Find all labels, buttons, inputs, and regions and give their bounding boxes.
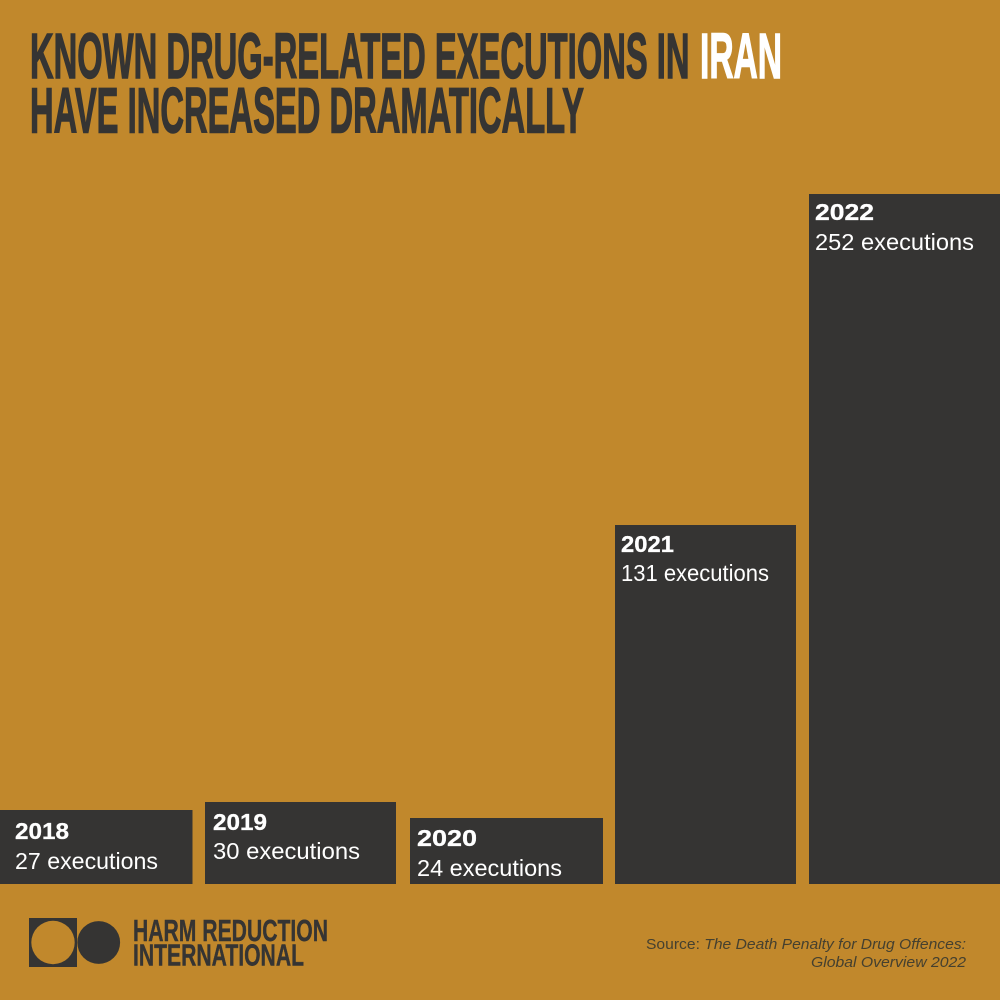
logo wordmark	[133, 914, 328, 972]
bar chart	[0, 194, 1000, 884]
bar: 2018	[0, 810, 192, 884]
bar: 2018: 2018	[15, 818, 69, 844]
source note: Global Overview 2022	[811, 954, 967, 971]
source note	[646, 936, 967, 971]
logo wordmark: HARM REDUCTION	[133, 914, 328, 948]
logo: Harm Reduction International	[29, 914, 328, 972]
bar: 2020: 24 executions	[417, 855, 562, 881]
title: IRAN	[700, 20, 782, 92]
bar: 2020: 2020	[417, 825, 477, 851]
title	[30, 20, 782, 146]
bar: 2019: 30 executions	[213, 838, 360, 864]
bar: 2019: 2019	[213, 809, 267, 835]
bar: 2022	[809, 194, 1000, 884]
icon: square with circle and solid circle	[29, 918, 120, 967]
bar: 2021: 2021	[621, 531, 674, 557]
logo wordmark: INTERNATIONAL	[133, 938, 304, 972]
bar: 2019	[205, 802, 396, 884]
bar: 2020	[410, 818, 603, 884]
bar: 2021: 131 executions	[621, 560, 769, 586]
bar: 2018: 27 executions	[15, 848, 158, 874]
source note: Source: The Death Penalty for Drug Offences:	[646, 936, 966, 953]
bar: 2022: 252 executions	[815, 229, 974, 255]
bar: 2022: 2022	[815, 199, 874, 225]
bar: 2021	[615, 525, 796, 884]
